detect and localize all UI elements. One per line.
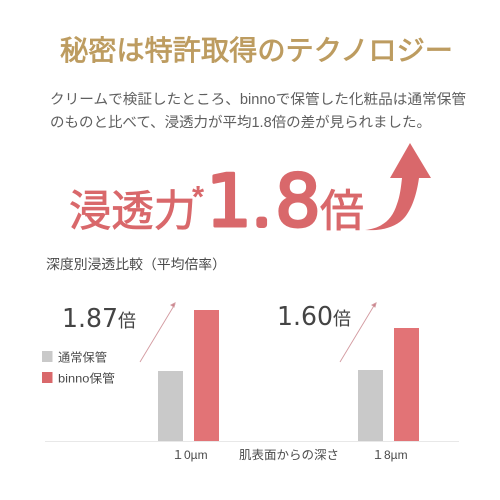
bar chart (42, 302, 459, 462)
headline: penetration 1.8x: 8 (275, 159, 321, 243)
bars: 10um (158, 310, 219, 441)
value label: 1.60x: 1.60 (277, 302, 333, 332)
intro text: クリームで検証したところ、binnoで保管した化粧品は通常保管 (50, 91, 466, 108)
value label: 1.60x: 倍 (333, 309, 351, 329)
headline: penetration 1.8x: 1 (206, 159, 252, 243)
headline: penetration 1.8x (69, 159, 364, 243)
headline: penetration 1.8x: 浸透力 (69, 188, 196, 236)
title: 秘密は特許取得のテクノロジー (60, 35, 453, 66)
headline: penetration 1.8x: * (192, 179, 205, 214)
chart heading: 深度別浸透比較（平均倍率） (46, 257, 226, 272)
baseline (45, 440, 459, 442)
headline: penetration 1.8x: 倍 (320, 187, 364, 236)
bars: 18um (358, 328, 419, 441)
intro text (50, 91, 466, 131)
arrow: 10um increase (140, 303, 175, 362)
axis labels: １0µm (172, 448, 208, 462)
icon: rising arrow (365, 143, 431, 230)
headline: penetration 1.8x: . (256, 192, 267, 234)
value label: 1.87x: 倍 (118, 311, 136, 331)
axis labels: 肌表面からの深さ (239, 448, 339, 462)
axis labels: １8µm (372, 448, 408, 462)
axis labels (172, 448, 408, 462)
legend: 通常保管 (58, 350, 107, 364)
arrow: 18um increase (340, 303, 376, 362)
legend (42, 350, 115, 386)
value label: 1.87x: 1.87 (62, 304, 118, 334)
legend: binno保管 (58, 370, 115, 386)
intro text: のものと比べて、浸透力が平均1.8倍の差が見られました。 (50, 114, 431, 131)
